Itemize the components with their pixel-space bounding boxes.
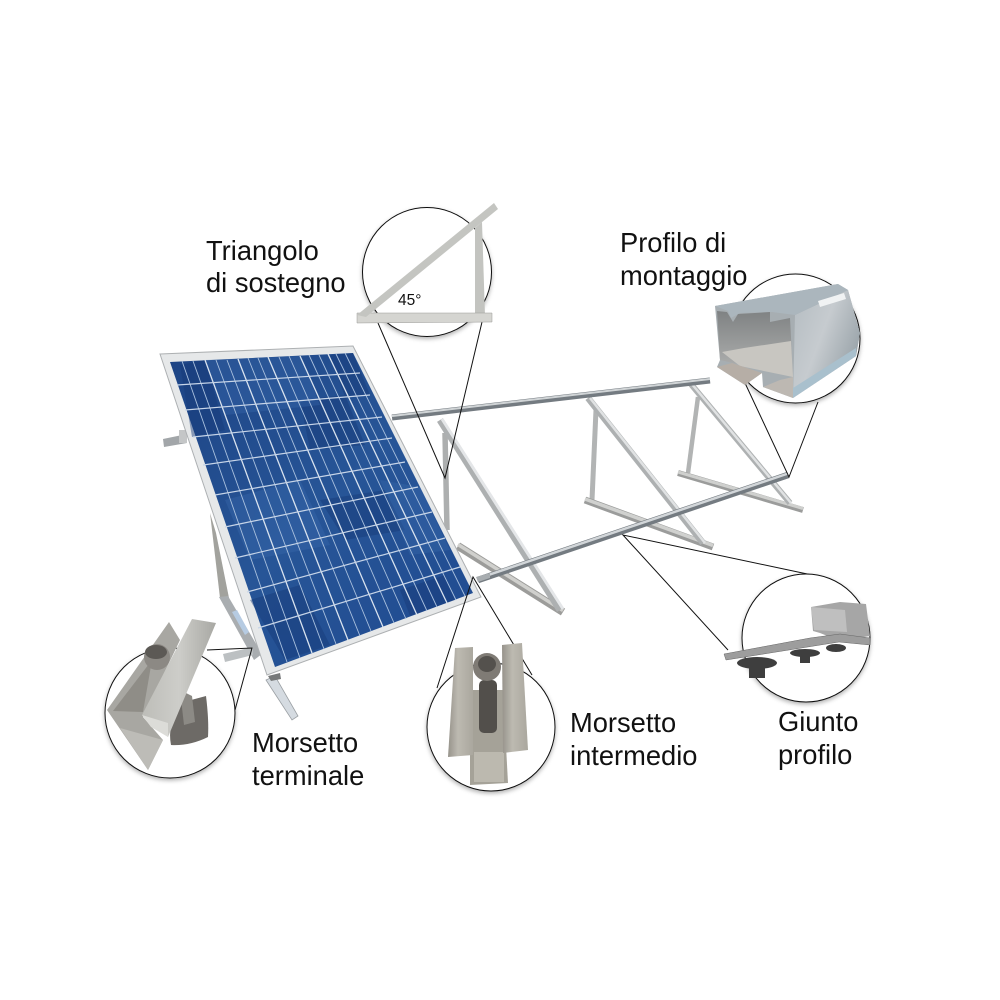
clamp channel [107,622,180,770]
joint rail front [811,607,847,632]
right rail [502,643,528,753]
profile highlight [818,293,846,307]
label: mounting profile: Profilo di [620,227,726,258]
base lower section [266,676,298,720]
rail stub behind panel [476,573,490,582]
left upper clamp [179,430,187,443]
cell column lines [205,354,447,653]
rear mounting structure [392,379,803,612]
solar panel [160,346,481,675]
callout: support triangle [357,203,498,336]
darker patches [180,353,455,660]
base bar [219,596,262,660]
clamp base plate [470,690,508,785]
bolt shaft [479,680,497,733]
panel cells [170,353,473,667]
left upper rail stub [163,434,187,447]
label: mounting profile: montaggio [620,260,747,291]
triangle hypotenuse [357,203,498,317]
label: end clamp: terminale [252,760,364,791]
triangle support 2 [585,398,713,547]
label: mid clamp: Morsetto [570,707,676,738]
bolt head [473,653,501,681]
triangle vertical bar [475,222,485,316]
profile channel wall [717,311,793,377]
triangle support 3 [678,383,803,510]
profile lower right foot [763,377,793,398]
rear leg [210,513,229,598]
left rail [448,647,473,757]
clamp bar edge [142,715,168,737]
profile top face [715,284,848,318]
left lower rail stub [223,647,253,662]
lens circle [427,663,555,791]
label: profile joint: Giunto [778,706,858,737]
profile silhouette [715,284,860,398]
panel frame [160,346,481,675]
top rail [392,379,710,418]
triangle support 1 [440,419,563,612]
lens circle [731,274,860,403]
callout: mid clamp [427,643,555,791]
angle label: 45° [398,292,421,309]
joint bolts [737,644,846,678]
clamp shaft [180,690,195,725]
bottom rail [478,474,788,580]
clamp bright bar [142,619,216,737]
label: end clamp: Morsetto [252,727,358,758]
base dark bracket [268,673,281,681]
callout: mounting profile [715,274,860,403]
clamp bolt head [144,644,170,670]
lens circle [742,574,870,702]
triangle base bar [357,313,492,323]
clamp base lighter [474,752,504,782]
joint plate [724,634,870,660]
lens circle [362,208,492,336]
front left legs and rail stubs [163,430,490,720]
lens circle [105,648,235,778]
callout: end clamp [105,619,235,778]
thin busbar lines [182,353,465,662]
clamp channel shade [113,660,152,712]
label: support triangle: di sostegno [206,267,346,298]
joint rail block [811,602,870,641]
clamp washer [170,696,208,745]
base bar highlight [232,610,249,635]
profile lower left foot [717,363,762,385]
callout lines [207,322,818,710]
label: mid clamp: intermedio [570,740,697,771]
profile blue reflection [793,348,856,398]
profile side face [793,290,860,398]
clamp lower face [120,728,163,770]
callout: profile joint [724,574,870,702]
cell row lines [177,373,460,628]
label: profile joint: profilo [778,739,852,770]
label: support triangle: Triangolo [206,235,319,266]
profile floor [722,341,793,377]
